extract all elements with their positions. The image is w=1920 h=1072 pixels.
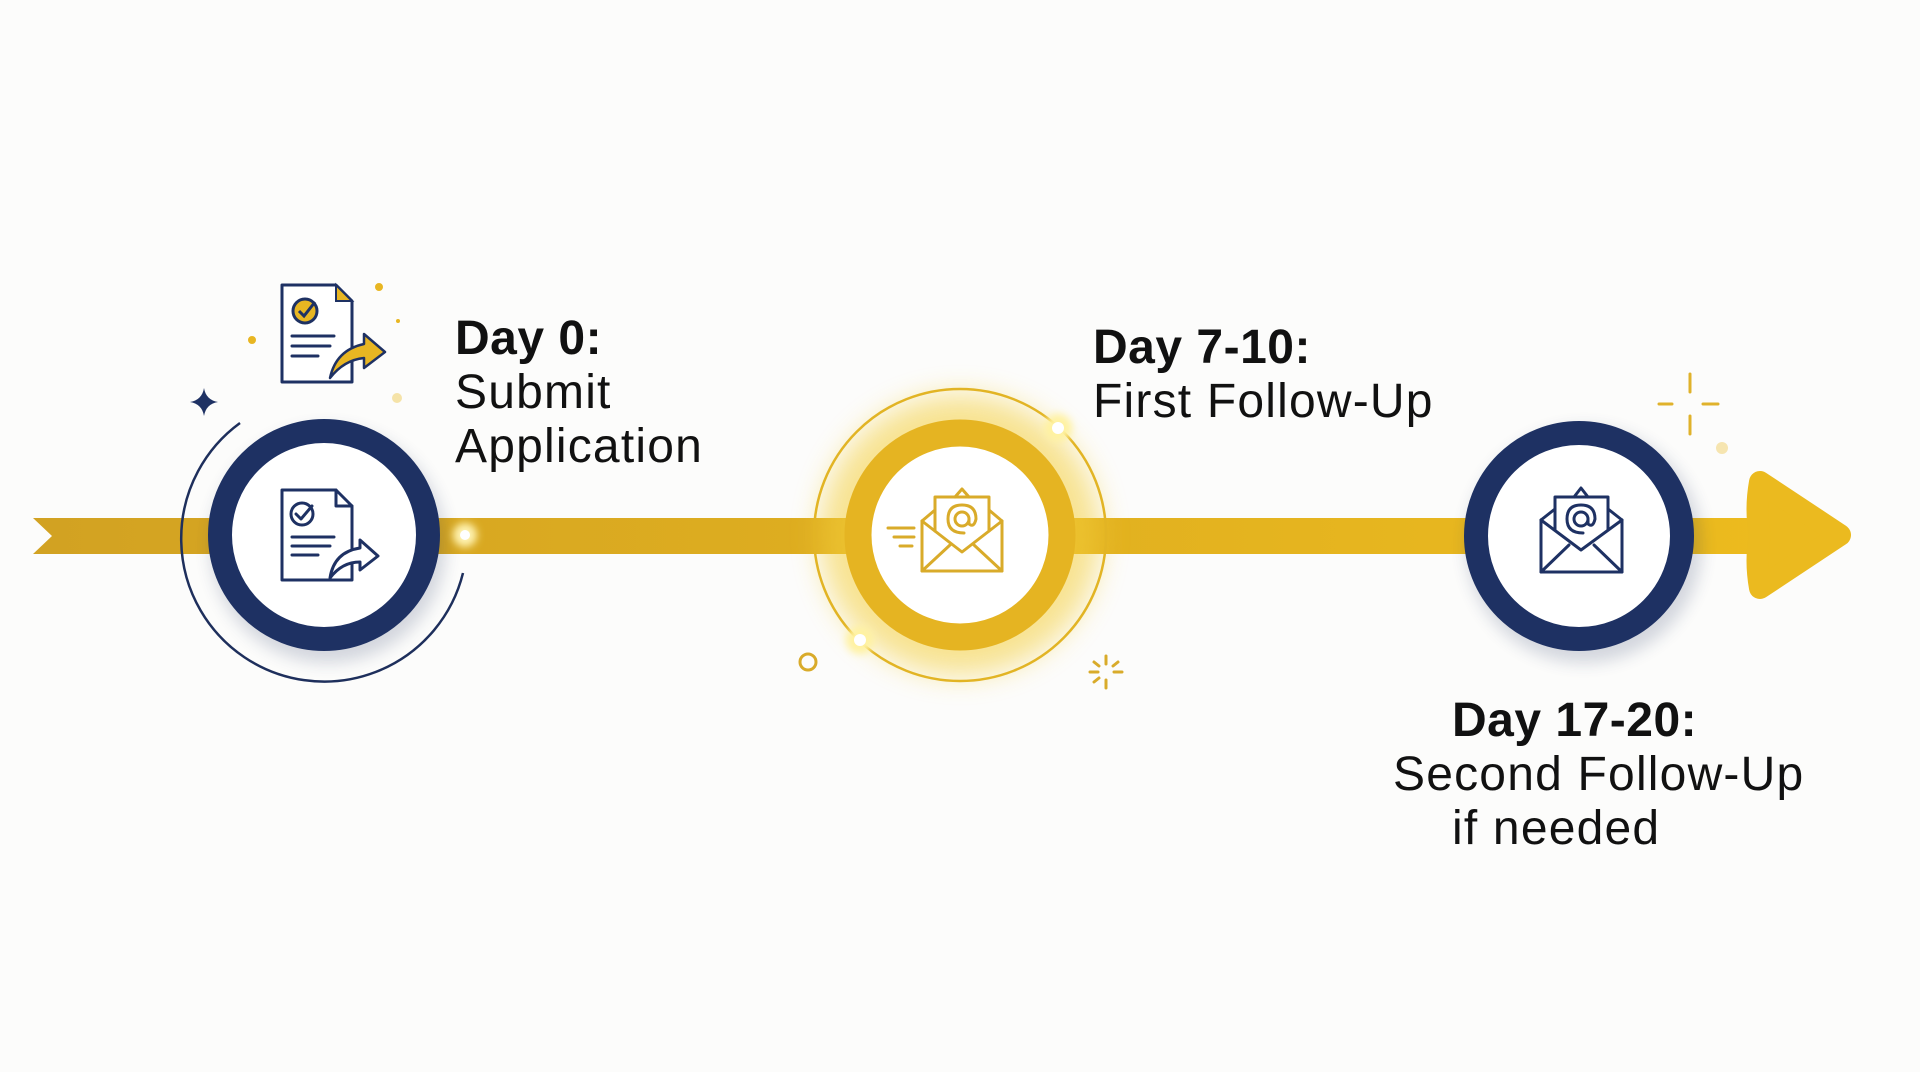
icon: floating document xyxy=(282,285,385,382)
label: day 0: Submit xyxy=(455,366,612,419)
decorations step 3 xyxy=(1659,374,1728,454)
step 3 node xyxy=(1466,427,1702,663)
label: day 17-20 xyxy=(1393,694,1804,855)
icon: document with arrow xyxy=(282,490,378,580)
step 2 node (highlighted) xyxy=(814,389,1106,681)
timeline bar xyxy=(33,482,1840,588)
arrowhead xyxy=(1758,482,1840,588)
label: day 7-10: Day 7-10: xyxy=(1093,321,1311,374)
decorations step 2 xyxy=(800,654,1122,688)
label: day 17-20: Day 17-20: xyxy=(1452,694,1697,747)
icon: envelope navy xyxy=(1541,488,1622,572)
label: day 17-20: if needed xyxy=(1452,802,1660,855)
label: day 0 xyxy=(455,312,703,473)
label: day 7-10 xyxy=(1093,321,1434,428)
label: day 7-10: First Follow-Up xyxy=(1093,375,1434,428)
icon: envelope gold xyxy=(888,489,1002,571)
decorations step 1 xyxy=(190,283,477,547)
step 1 node xyxy=(181,423,463,682)
label: day 0: Application xyxy=(455,420,703,473)
label: day 0: Day 0: xyxy=(455,312,602,365)
label: day 17-20: Second Follow-Up xyxy=(1393,748,1804,801)
